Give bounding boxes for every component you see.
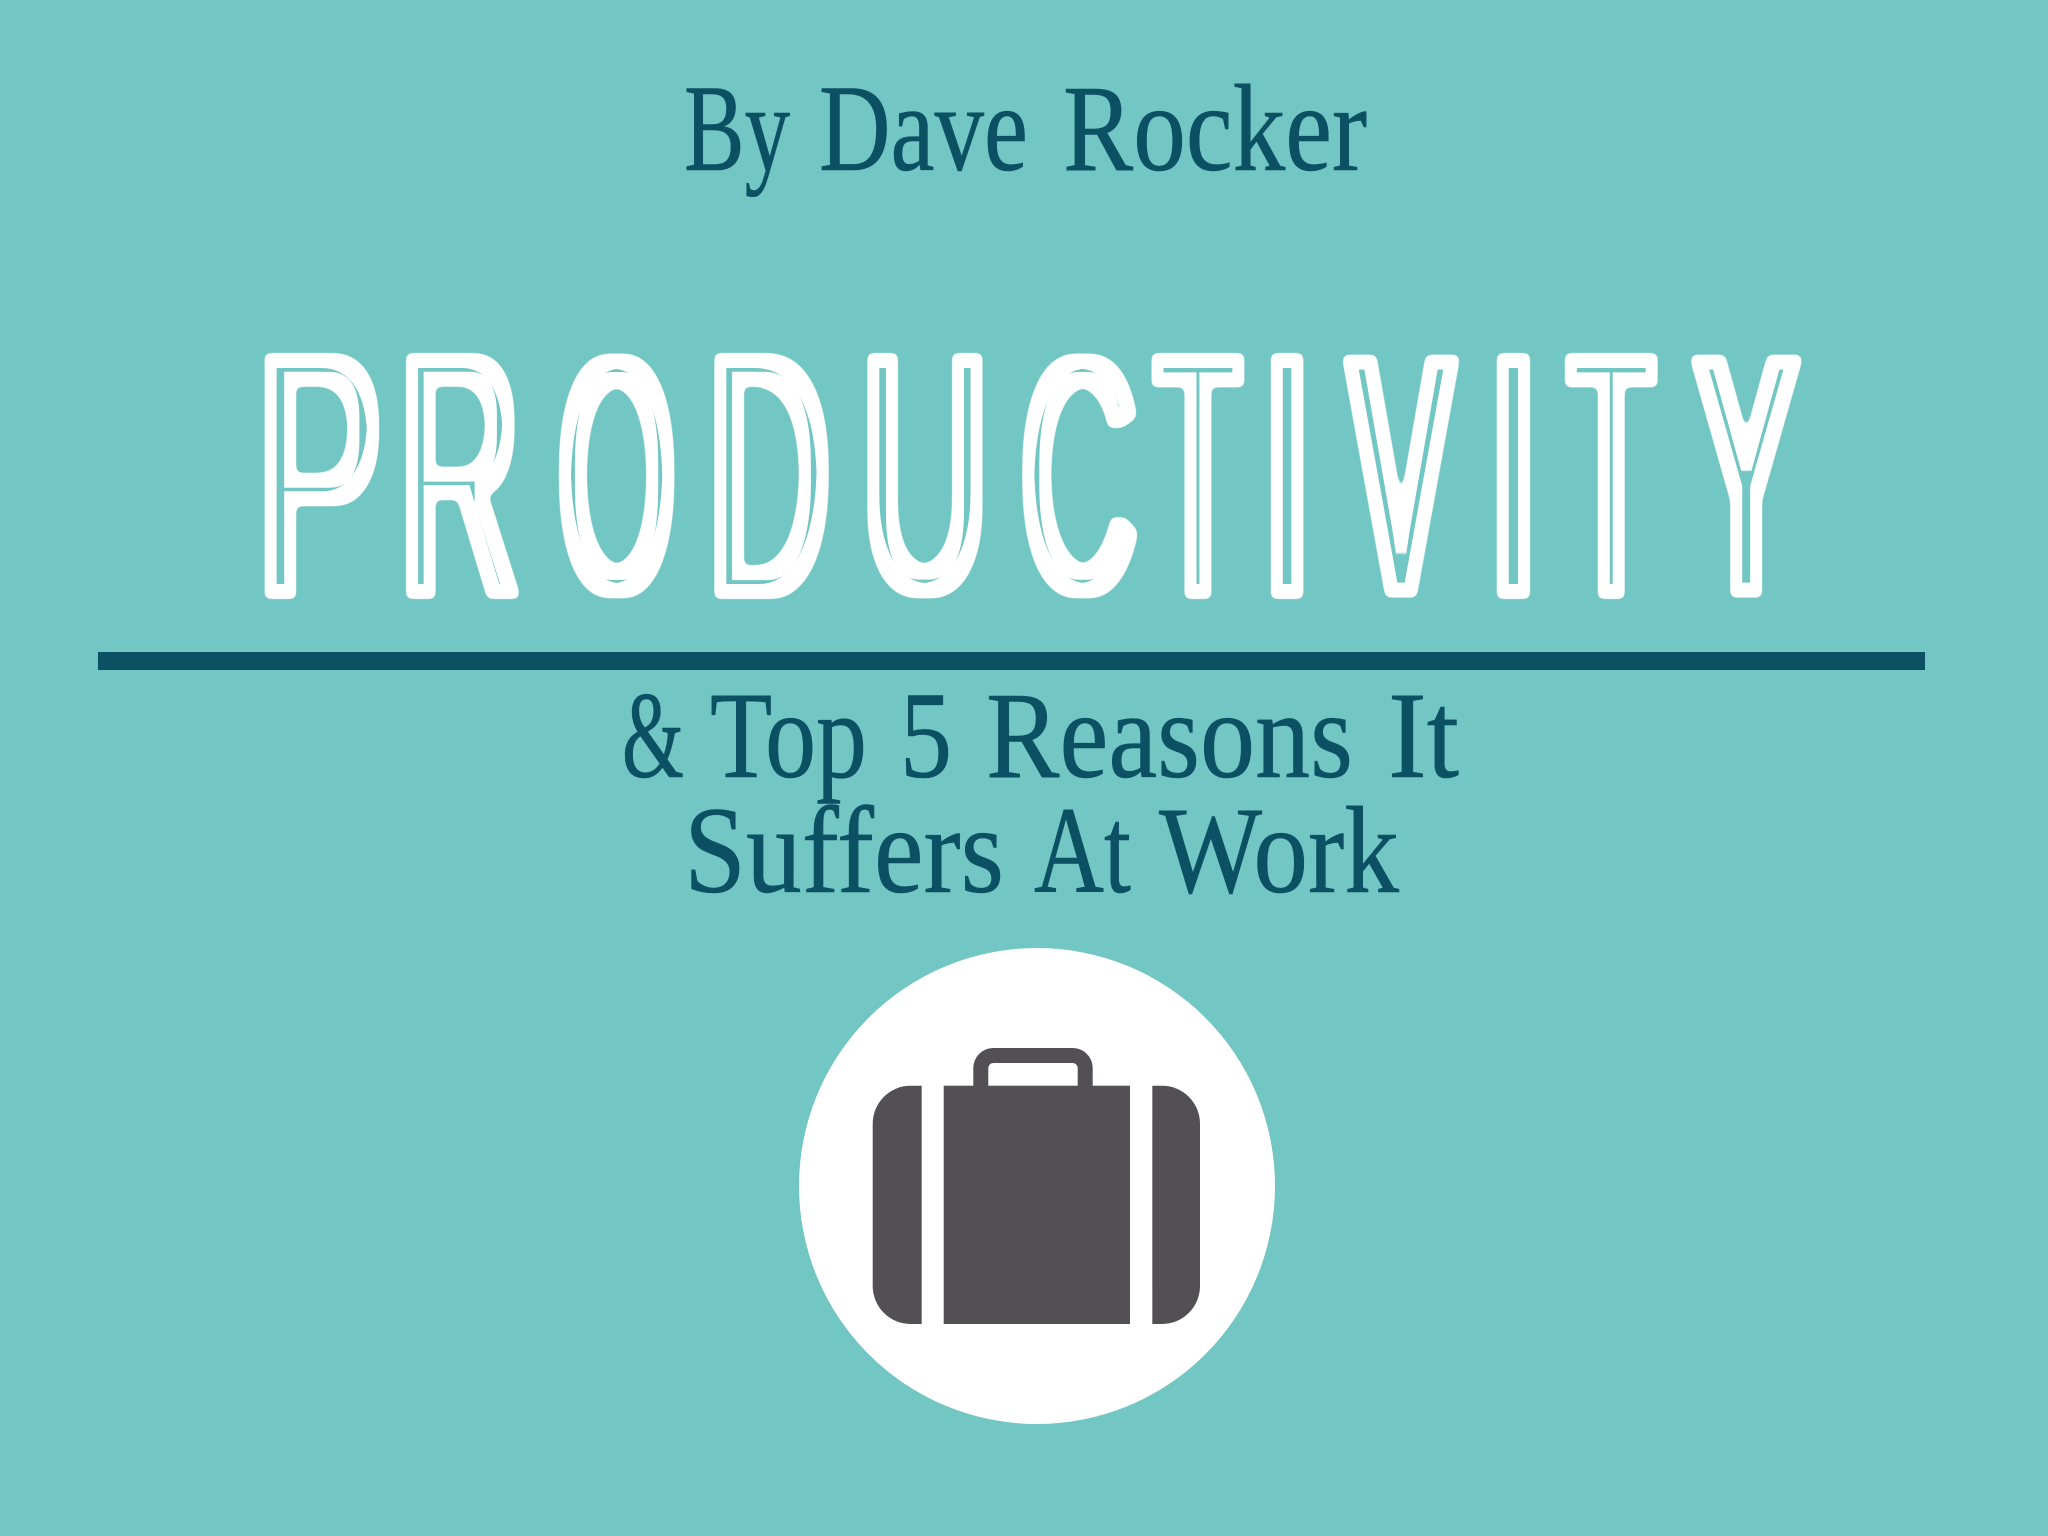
subtitle line 2: Suffers [684,782,1004,919]
byline: Dave [819,60,1028,197]
title: PRODUCTIVITY: O [559,289,675,662]
byline: By [684,60,790,197]
subtitle line 1: Top [710,667,867,804]
handle [973,1048,1093,1086]
title: PRODUCTIVITY: T [1155,282,1241,668]
subtitle line 1: 5 [900,667,952,804]
right panel [1152,1086,1200,1324]
title: PRODUCTIVITY: I [1485,283,1542,669]
subtitle line 2: At [1034,782,1131,919]
title: PRODUCTIVITY: Y [1699,295,1793,658]
title: PRODUCTIVITY [256,281,1793,669]
byline: Rocker [1063,60,1367,197]
divider bar [98,652,1925,670]
title: PRODUCTIVITY: R [399,282,520,669]
white circle [799,948,1275,1424]
left panel [873,1086,922,1324]
title: PRODUCTIVITY: P [256,283,382,669]
title: PRODUCTIVITY: U [861,283,989,664]
title: PRODUCTIVITY: D [707,281,830,669]
subtitle [622,667,1459,919]
briefcase [873,1048,1200,1324]
subtitle line 1: It [1388,667,1459,804]
subtitle line 2: Work [1159,782,1399,919]
title: PRODUCTIVITY: V [1353,295,1449,658]
subtitle line 1: Reasons [986,667,1353,804]
title: PRODUCTIVITY: C [1021,289,1136,663]
title: PRODUCTIVITY: I [1259,281,1315,669]
icon: briefcase in white circle [799,948,1275,1424]
centre panel [944,1086,1130,1324]
subtitle line 1: & [622,667,684,804]
title: PRODUCTIVITY: T [1569,282,1654,668]
